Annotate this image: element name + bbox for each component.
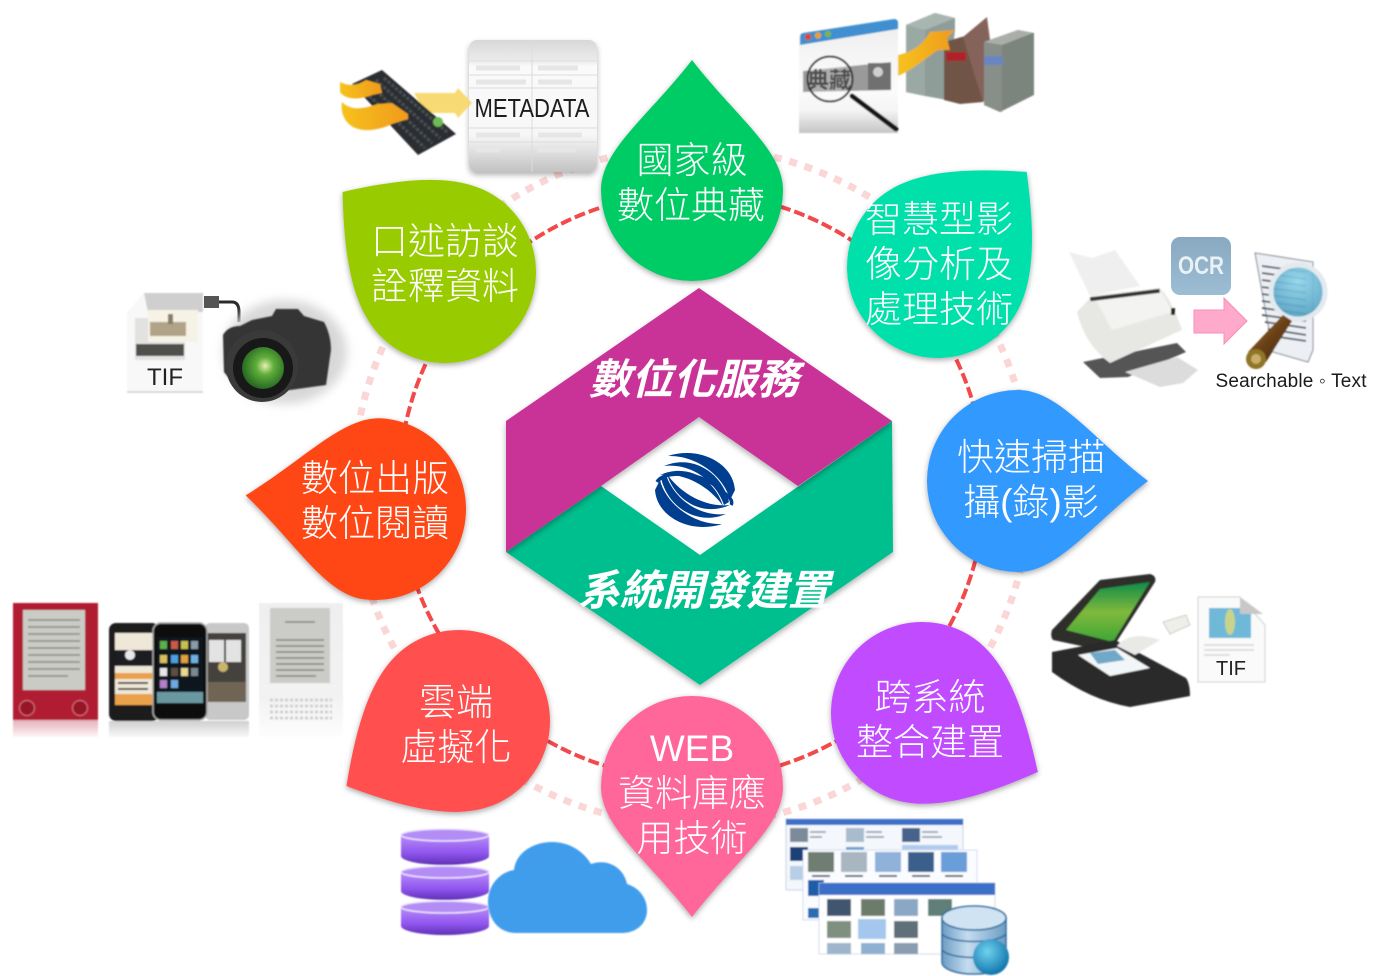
TIF label: TIF [1216, 658, 1246, 680]
database stack [401, 829, 489, 935]
petal label: 雲端 [419, 682, 493, 723]
petal label: 整合建置 [856, 722, 1004, 763]
petal shape [301, 597, 583, 865]
petal: 數位出版數位閱讀 [236, 405, 475, 609]
petal: 口述訪談詮釋資料 [287, 120, 573, 400]
petal label: 快速掃描 [957, 437, 1105, 478]
metadata card [469, 40, 597, 172]
petal shape [287, 120, 573, 400]
keyboard [340, 70, 472, 155]
heading: digital services: 數位化服務 [589, 356, 805, 403]
cloud [488, 842, 647, 933]
petal: 快速掃描攝(錄)影 [927, 390, 1148, 572]
petal label: 跨系統 [874, 677, 986, 718]
petal: 跨系統整合建置 [800, 591, 1079, 853]
yellow arrow [414, 88, 472, 118]
petal label: 攝(錄)影 [963, 482, 1099, 523]
icon: TIF file and camera [127, 293, 347, 404]
lower green band [506, 421, 893, 685]
pink arrow [1194, 298, 1247, 344]
outer pale dashed ring [353, 147, 1031, 825]
red reader [13, 603, 98, 737]
petal label: 用技術 [636, 818, 748, 859]
petal shape [809, 110, 1093, 396]
icon: database stack and cloud [401, 829, 647, 935]
database cylinder [942, 906, 1009, 975]
search text: 典藏 [807, 68, 851, 93]
magnifier [808, 56, 896, 129]
window middle [803, 850, 977, 920]
icon: scanner and OCR [1069, 237, 1367, 392]
petal label: 資料庫應 [618, 773, 766, 814]
OCR badge: OCR [1178, 252, 1224, 280]
icon: browser search and books [799, 13, 1034, 133]
petal label: 口述訪談 [371, 221, 519, 262]
globe [973, 939, 1009, 975]
TIF file [127, 293, 203, 392]
phone center [153, 623, 207, 720]
icon: flatbed scanner and TIF [1051, 574, 1265, 707]
camera [223, 300, 347, 404]
usb cable [216, 302, 239, 322]
inner red dashed ring [399, 193, 985, 779]
petal shape [927, 390, 1148, 572]
phone right [205, 623, 249, 720]
petal label: 國家級 [636, 140, 748, 181]
metadata label: METADATA [474, 93, 590, 123]
document scanner [1069, 250, 1198, 387]
searchable text label: Searchable ◦ Text [1216, 371, 1367, 392]
icon: photo browser windows with database [786, 819, 1009, 975]
petal: WEB資料庫應用技術 [601, 696, 783, 917]
petal label: 智慧型影 [865, 199, 1013, 240]
petal label: 像分析及 [865, 244, 1013, 285]
search bar [803, 62, 891, 92]
icon: e-readers and smartphones [13, 603, 343, 737]
TIF label: TIF [147, 364, 183, 391]
logo [655, 453, 735, 527]
flatbed scanner [1051, 574, 1190, 707]
petal label: 數位出版 [301, 458, 449, 499]
petal: 雲端虛擬化 [301, 597, 583, 865]
heading: system development: 系統開發建置 [578, 567, 835, 614]
books [906, 13, 1034, 112]
TIF file [1198, 597, 1265, 682]
window back [786, 819, 963, 890]
reflection [109, 721, 249, 737]
petal label: 數位典藏 [617, 185, 765, 226]
petal shape [601, 696, 783, 917]
OCR badge [1171, 237, 1231, 295]
petal label: 數位閱讀 [301, 503, 449, 544]
typing hands [340, 80, 382, 98]
title bar [800, 19, 898, 45]
petal shape [601, 60, 783, 281]
phone left [109, 623, 159, 721]
central hexagon [506, 288, 893, 685]
reaching hand [898, 30, 955, 76]
petal label: 詮釋資料 [371, 266, 519, 307]
petal shape [800, 591, 1079, 853]
kindle [259, 603, 343, 737]
icon: keyboard to metadata card [340, 40, 597, 172]
upper magenta band [506, 288, 892, 552]
petal label: WEB [650, 728, 734, 769]
window front [819, 883, 995, 954]
browser window [799, 20, 898, 133]
petal label: 處理技術 [865, 289, 1013, 330]
petal: 國家級數位典藏 [601, 60, 783, 281]
document with magnifier [1246, 253, 1325, 369]
petal label: 虛擬化 [400, 727, 512, 768]
petal: 智慧型影像分析及處理技術 [809, 110, 1093, 396]
petal shape [236, 405, 475, 609]
